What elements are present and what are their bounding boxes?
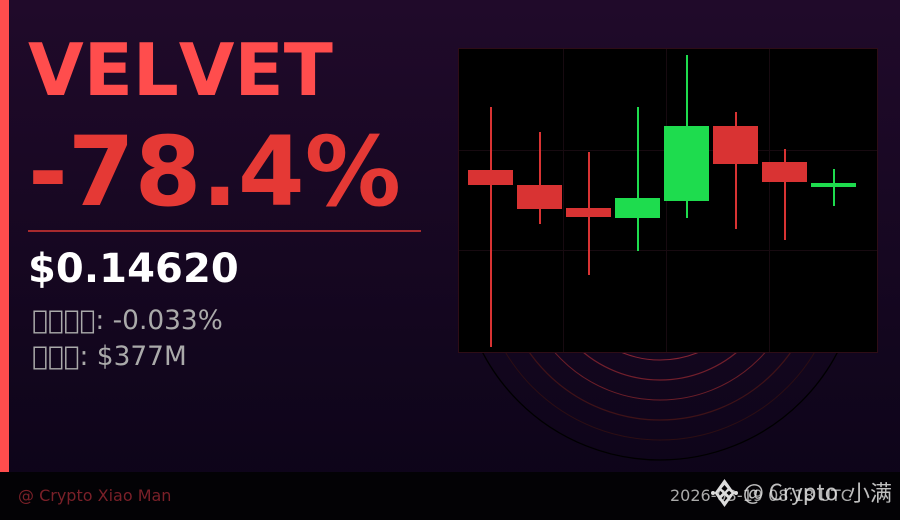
text: 小满	[848, 476, 892, 508]
candle 2	[517, 132, 562, 224]
candle 1	[468, 107, 513, 347]
percentage change: -78.4%	[28, 116, 401, 228]
candle 6	[713, 112, 758, 229]
footer date: 2026-03-19 08:18 UTC	[670, 486, 852, 505]
candle 7	[762, 149, 807, 240]
footer handle: @ Crypto Xiao Man	[18, 486, 171, 505]
watermark text	[743, 475, 892, 508]
watermark text: @ Crypto	[743, 475, 838, 507]
divider line	[28, 230, 421, 232]
left accent bar	[0, 0, 9, 472]
candle 3	[566, 152, 611, 275]
stat: value: : $377M	[32, 341, 187, 372]
title: token name: VELVET	[28, 28, 333, 112]
footer bar	[0, 472, 900, 520]
candle 8	[811, 169, 856, 206]
candlestick chart panel	[458, 48, 878, 353]
price: $0.14620	[28, 246, 239, 292]
candle 5	[664, 55, 709, 218]
candle 4	[615, 107, 660, 251]
stat: rate: : -0.033%	[32, 305, 223, 336]
icon: watermark diamond logo	[711, 479, 738, 507]
